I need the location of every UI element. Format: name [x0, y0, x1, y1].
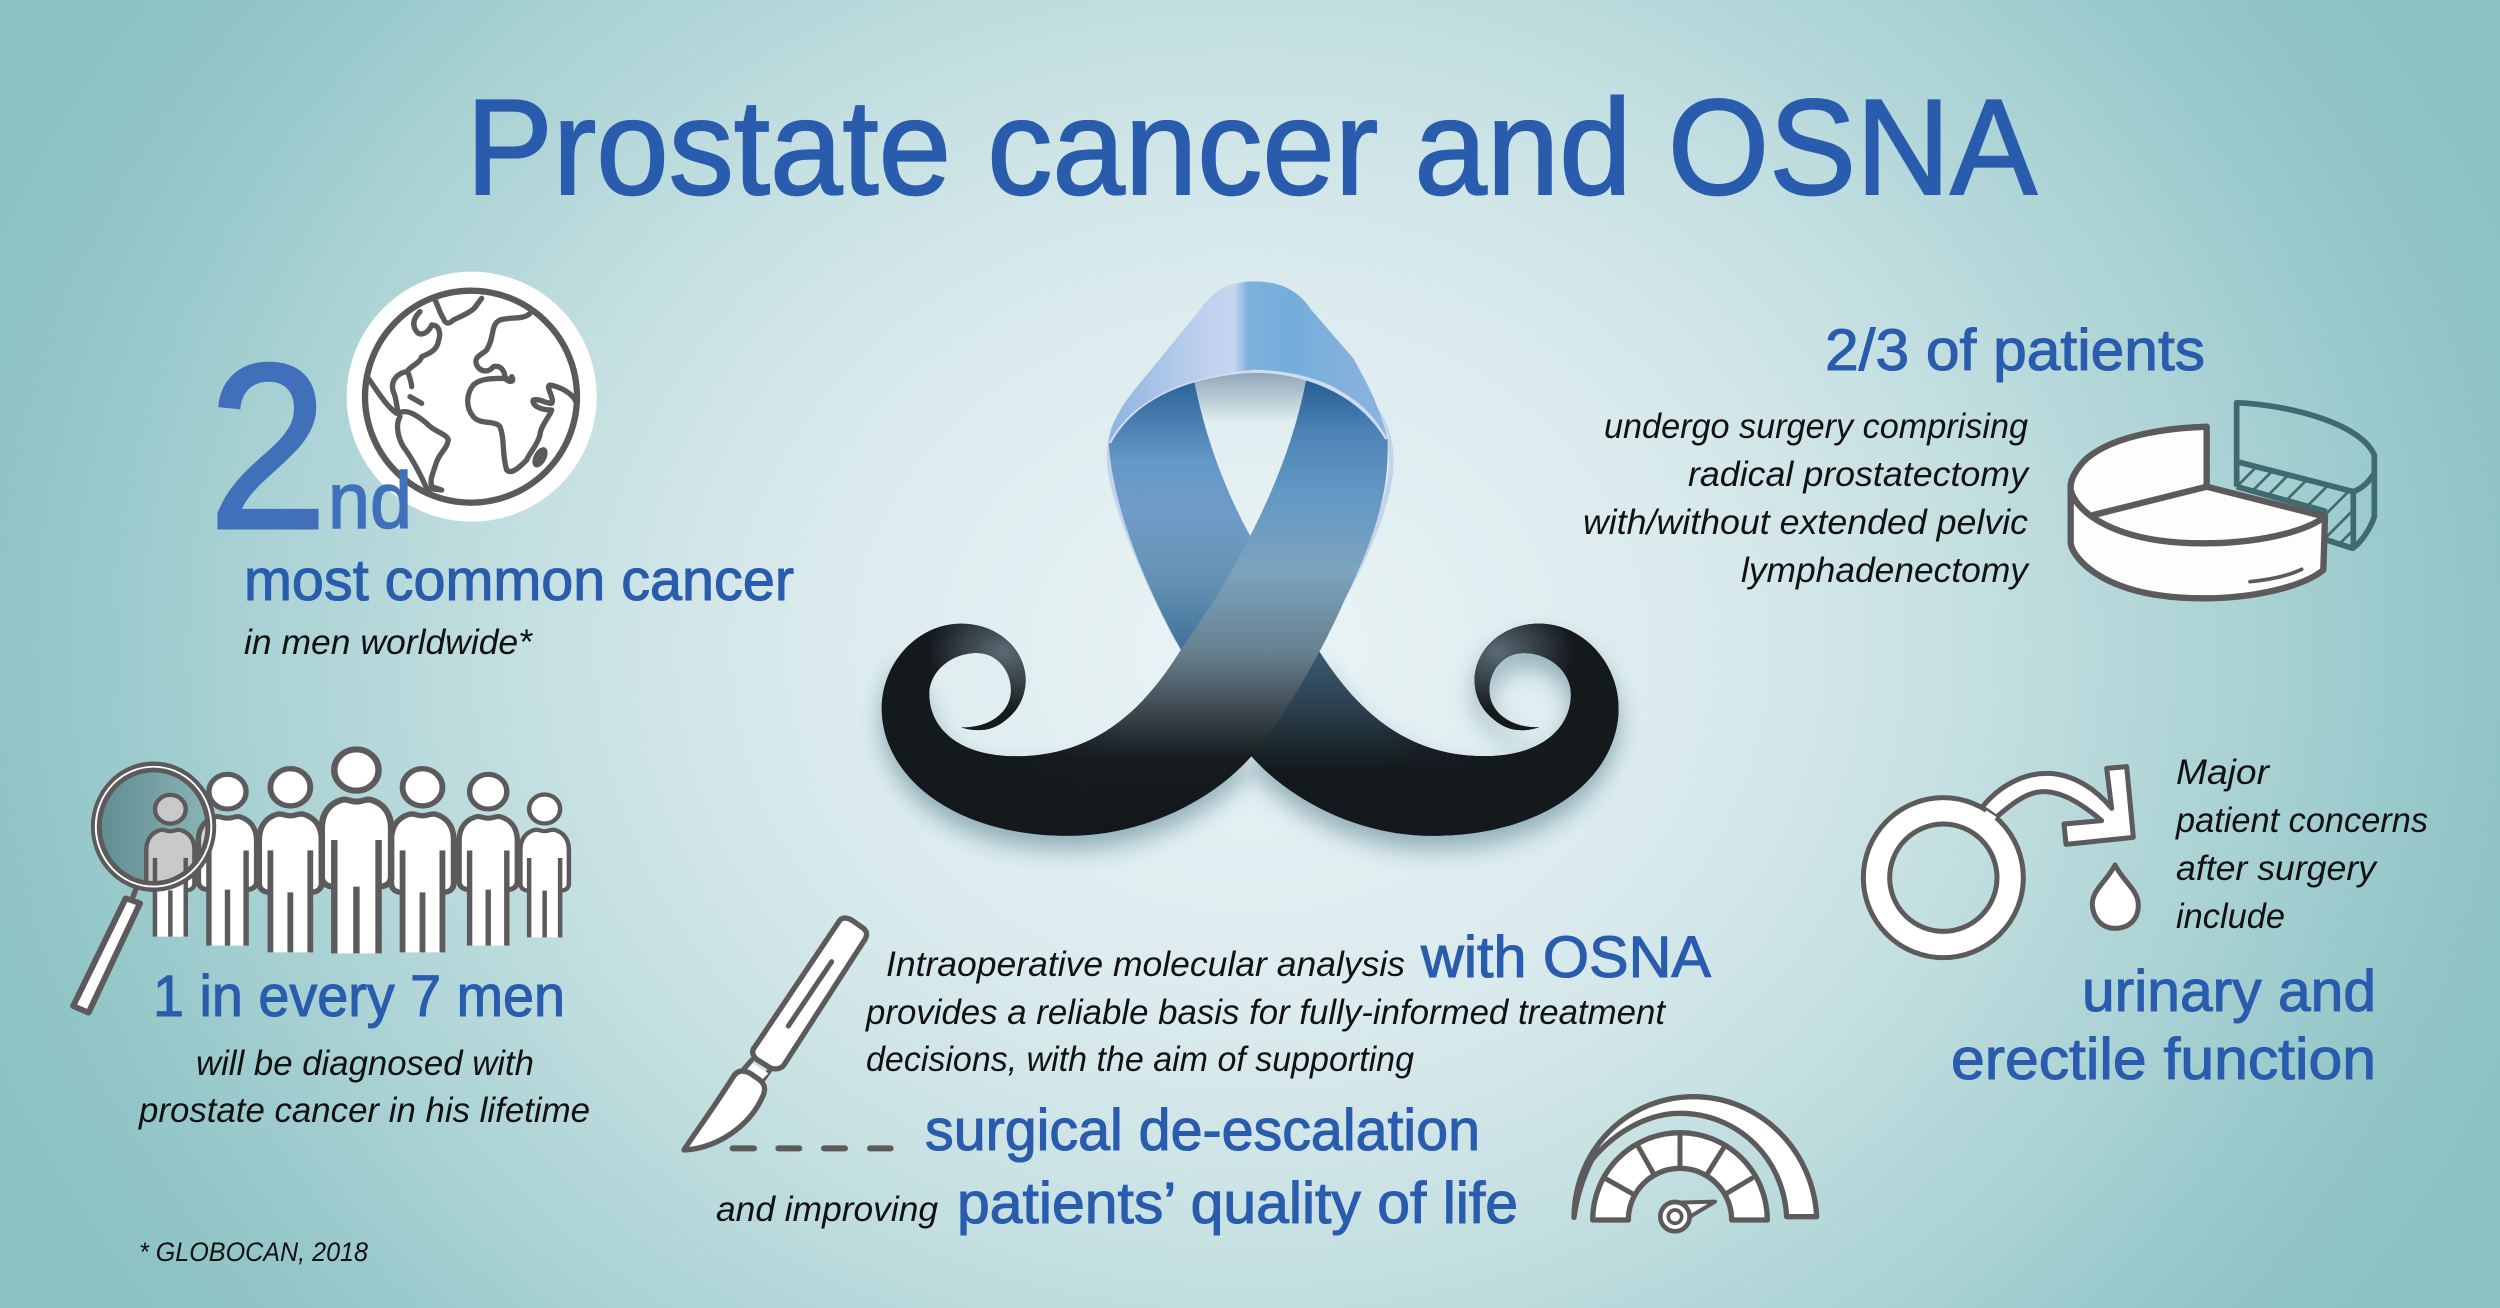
subtext line 2: prostate cancer in his lifetime — [138, 1091, 590, 1130]
heading: with OSNA: with OSNA — [1420, 925, 1711, 990]
big 2: 2 — [208, 315, 328, 579]
body text: decisions, with the aim of supporting — [866, 1040, 1415, 1079]
heading — [1951, 959, 2376, 1092]
body text: patient concerns — [2175, 801, 2428, 840]
body text: radical prostatectomy — [1688, 455, 2031, 494]
body text: lymphadenectomy — [1741, 551, 2031, 590]
text: and improving: and improving — [716, 1190, 939, 1229]
icon: pie chart — [2071, 403, 2374, 598]
subtext: in men worldwide* — [244, 623, 533, 662]
body text: after surgery — [2176, 849, 2379, 888]
panel: urinary and erectile function — [1863, 753, 2428, 1092]
panel: 2/3 of patients — [1583, 318, 2374, 598]
title: Prostate cancer and OSNA — [466, 71, 2037, 223]
body text — [1583, 407, 2031, 590]
body text: Intraoperative molecular analysis — [886, 945, 1405, 984]
panel: 1 in every 7 men — [73, 749, 590, 1130]
body text: provides a reliable basis for fully-informed treatment — [865, 993, 1666, 1032]
heading: surgical de-escalation: surgical de-escalation — [925, 1098, 1480, 1163]
body text — [865, 945, 1666, 1079]
heading: quality of life: patients’ quality of life — [957, 1171, 1518, 1236]
heading: 1 in every 7 men — [153, 964, 565, 1029]
heading: most common cancer — [244, 548, 794, 613]
icon: globe — [347, 272, 597, 522]
nd suffix: nd — [328, 456, 412, 545]
icon: male symbol and drop — [1863, 767, 2138, 958]
footnote: * GLOBOCAN, 2018 — [139, 1237, 368, 1267]
body text — [2175, 753, 2428, 936]
panel: 2nd most common cancer — [208, 272, 794, 662]
body text: with/without extended pelvic — [1583, 503, 2029, 542]
icon: gauge — [1574, 1097, 1817, 1231]
body text: undergo surgery comprising — [1604, 407, 2029, 446]
body text: Major — [2176, 753, 2270, 792]
icon: scalpel — [684, 918, 891, 1150]
subtext: will be diagnosed with — [196, 1044, 534, 1083]
heading: 2/3 of patients — [1825, 318, 2205, 383]
heading: urinary and — [2082, 959, 2376, 1024]
icon: people and magnifier — [73, 749, 569, 1013]
heading: erectile function — [1951, 1027, 2376, 1092]
panel: with OSNA — [684, 918, 1817, 1236]
icon: blue ribbon moustache — [882, 281, 1619, 849]
body text: include — [2176, 897, 2285, 936]
